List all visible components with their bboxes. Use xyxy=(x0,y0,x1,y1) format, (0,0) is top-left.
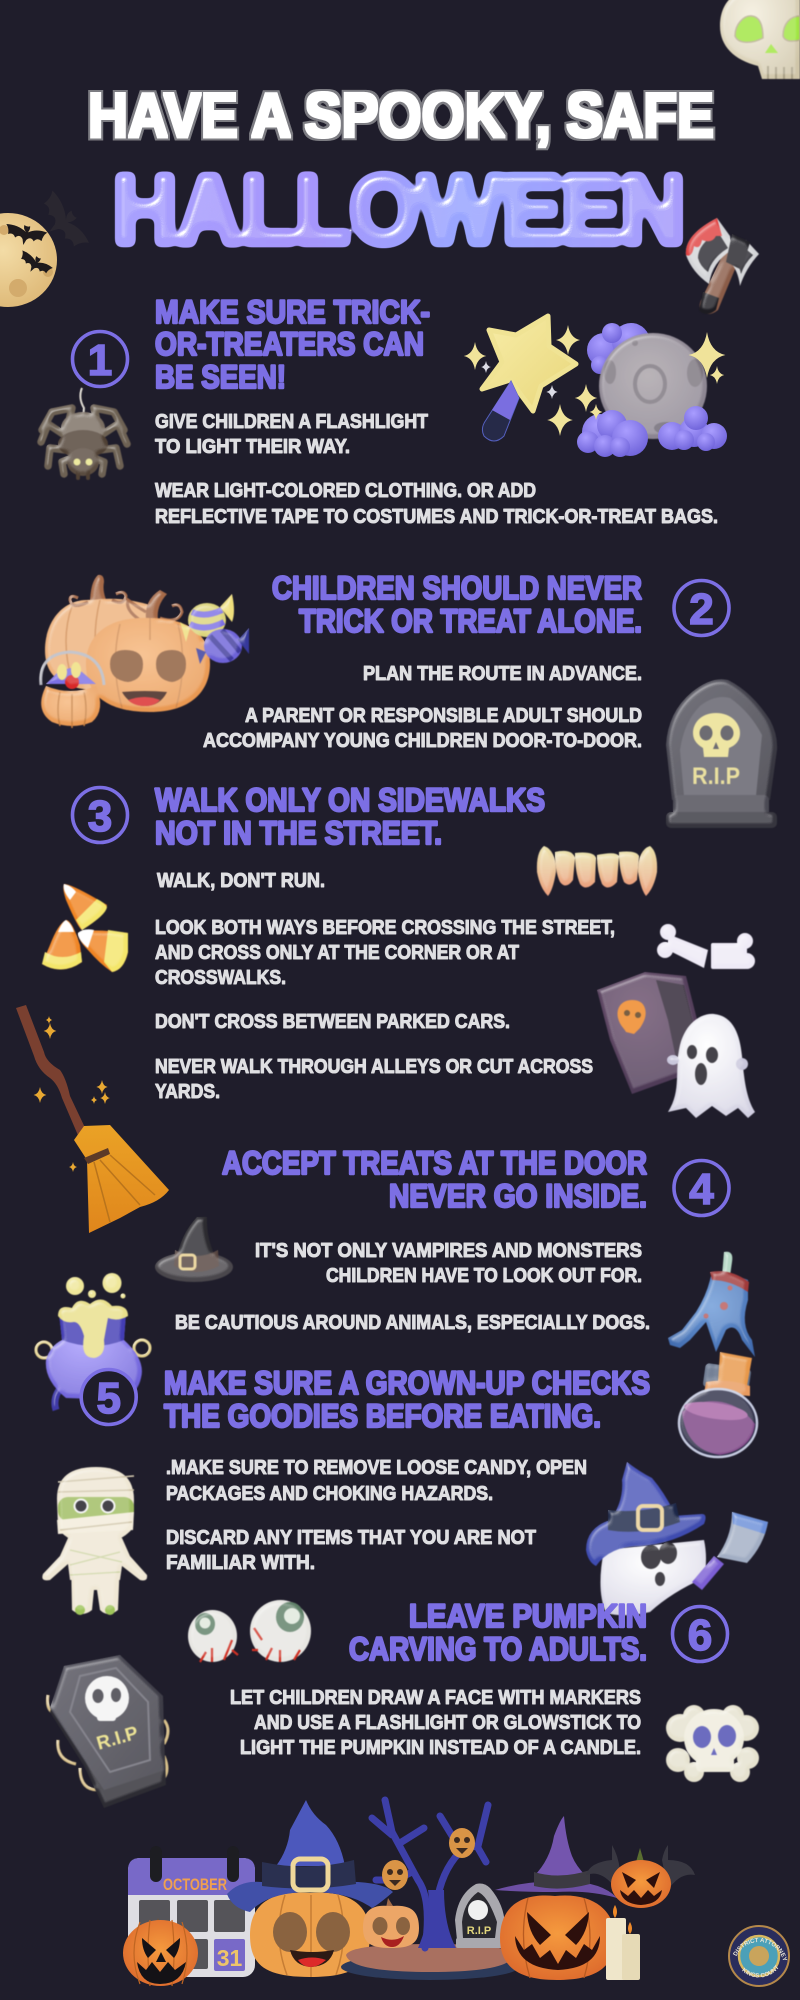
body 3: NEVER WALK THROUGH ALLEYS OR CUT ACROSS xyxy=(155,1056,593,1078)
body 6: LIGHT THE PUMPKIN INSTEAD OF A CANDLE. xyxy=(240,1737,641,1759)
icon: eyeballs xyxy=(188,1600,311,1662)
body 1: WEAR LIGHT-COLORED CLOTHING. OR ADD xyxy=(155,480,536,502)
body 2: ACCOMPANY YOUNG CHILDREN DOOR-TO-DOOR. xyxy=(203,730,642,752)
number badge 5: 5 xyxy=(96,1374,121,1423)
icon: broom xyxy=(16,1005,169,1233)
heading 6 xyxy=(349,1598,647,1667)
number badge 3: 3 xyxy=(88,792,112,841)
small pumpkin xyxy=(363,1898,419,1948)
icon: gravestone with skull xyxy=(666,679,777,828)
icon: zombie hand xyxy=(668,1252,755,1357)
small R.I.P gravestone: R.I.P xyxy=(467,1925,491,1937)
number badge 6: 6 xyxy=(688,1611,712,1660)
heading 3: WALK ONLY ON SIDEWALKS xyxy=(155,782,545,818)
body 1 xyxy=(155,411,718,528)
number badge 3 xyxy=(72,788,128,842)
body 1: TO LIGHT THEIR WAY. xyxy=(155,436,350,458)
icon: vampire fangs xyxy=(537,846,657,896)
calendar: OCTOBER xyxy=(163,1875,227,1894)
icon: gray coffin R.I.P: R.I.P xyxy=(94,1723,141,1755)
bat-winged pumpkin xyxy=(586,1845,695,1908)
icon: broken bone xyxy=(657,924,755,969)
platform xyxy=(341,1944,519,1980)
icon: cauldron xyxy=(36,1273,150,1410)
clouds behind moon xyxy=(587,323,664,374)
section 3 xyxy=(72,782,615,1103)
heading 5: THE GOODIES BEFORE EATING. xyxy=(164,1398,601,1434)
icon: skull and crossbones xyxy=(666,1705,759,1782)
body 4: IT'S NOT ONLY VAMPIRES AND MONSTERS xyxy=(255,1240,642,1262)
body 6 xyxy=(230,1687,641,1759)
body 2: A PARENT OR RESPONSIBLE ADULT SHOULD xyxy=(245,705,642,727)
wand xyxy=(482,381,519,441)
section 1 xyxy=(72,294,718,528)
candles xyxy=(606,1905,640,1980)
heading 1: BE SEEN! xyxy=(155,359,286,395)
body 4: BE CAUTIOUS AROUND ANIMALS, ESPECIALLY DOGS. xyxy=(175,1312,650,1334)
number badge 2: 2 xyxy=(689,585,714,634)
body 6: AND USE A FLASHLIGHT OR GLOWSTICK TO xyxy=(254,1712,641,1734)
heading 2 xyxy=(272,570,642,639)
section 5 xyxy=(81,1365,650,1574)
body 3 xyxy=(155,870,615,1103)
body 3: CROSSWALKS. xyxy=(155,967,286,989)
body 5: .MAKE SURE TO REMOVE LOOSE CANDY, OPEN xyxy=(166,1457,587,1479)
body 5: FAMILIAR WITH. xyxy=(166,1552,315,1574)
heading 3: NOT IN THE STREET. xyxy=(155,815,442,851)
blue tree with pumpkins xyxy=(372,1800,488,1948)
seal: District Attorney Kings County: DISTRICT ATTORNEY xyxy=(732,1938,788,1960)
heading 2: CHILDREN SHOULD NEVER xyxy=(272,570,642,606)
title: Halloween bubble word: HALLOWEEN xyxy=(113,155,685,264)
icon: white ghost xyxy=(667,1014,755,1118)
icon: moon with bats xyxy=(0,188,93,307)
heading 1 xyxy=(155,294,430,395)
icon: wizard ghost with cleaver xyxy=(586,1462,768,1615)
calendar xyxy=(128,1846,255,1977)
body 5: PACKAGES AND CHOKING HAZARDS. xyxy=(166,1483,493,1505)
number badge 1: 1 xyxy=(88,336,112,385)
body 2: PLAN THE ROUTE IN ADVANCE. xyxy=(363,663,642,685)
body 5: DISCARD ANY ITEMS THAT YOU ARE NOT xyxy=(166,1527,536,1549)
sparkles xyxy=(464,325,725,436)
body 3: YARDS. xyxy=(155,1081,220,1103)
heading 4 xyxy=(222,1145,647,1214)
body 3: LOOK BOTH WAYS BEFORE CROSSING THE STREET, xyxy=(155,917,615,939)
candy xyxy=(180,594,249,664)
icon: purple coffin xyxy=(597,972,701,1094)
body 5 xyxy=(166,1457,587,1574)
number badge 4: 4 xyxy=(689,1165,714,1214)
back pumpkin xyxy=(45,575,150,690)
number badge 6 xyxy=(672,1606,728,1662)
body 2 xyxy=(203,663,642,752)
heading 1: MAKE SURE TRICK- xyxy=(155,294,430,330)
large pumpkin with blue witch hat xyxy=(227,1800,393,1977)
section 6 xyxy=(230,1598,728,1759)
icon: star wand, sparkles and moon with clouds xyxy=(464,316,727,457)
title line: HAVE A SPOOKY, SAFE xyxy=(88,81,714,151)
icon: gray coffin R.I.P xyxy=(48,1655,168,1808)
body 3: AND CROSS ONLY AT THE CORNER OR AT xyxy=(155,942,519,964)
number badge 1 xyxy=(72,332,128,386)
icon: skull top right xyxy=(720,0,800,79)
icon: bloody axe xyxy=(686,218,759,314)
body 3: DON'T CROSS BETWEEN PARKED CARS. xyxy=(155,1011,510,1033)
icon: witch hat xyxy=(155,1217,233,1282)
icon: spider xyxy=(41,388,127,478)
heading 1: OR-TREATERS CAN xyxy=(155,326,424,362)
gray moon xyxy=(599,333,707,439)
icon: potion bottle xyxy=(679,1352,757,1457)
body 1: REFLECTIVE TAPE TO COSTUMES AND TRICK-OR-TREAT BAGS. xyxy=(155,506,718,528)
body 3: WALK, DON'T RUN. xyxy=(157,870,325,892)
number badge 4 xyxy=(674,1160,729,1216)
icon: candy corn xyxy=(42,884,128,972)
icon: pumpkins with candy basket xyxy=(41,575,249,728)
heading 3 xyxy=(155,782,545,851)
candy basket xyxy=(41,652,104,728)
seal: District Attorney Kings County: KINGS COUNTY xyxy=(742,1964,778,1978)
heading 4: ACCEPT TREATS AT THE DOOR xyxy=(222,1145,647,1181)
small R.I.P gravestone xyxy=(455,1884,505,1948)
left jack-o-lantern xyxy=(123,1918,198,1986)
clouds front xyxy=(577,406,727,457)
heading 2: TRICK OR TREAT ALONE. xyxy=(299,603,642,639)
orange jack-o-lantern with purple hat xyxy=(495,1816,617,1980)
heading 6: LEAVE PUMPKIN xyxy=(409,1598,647,1634)
star xyxy=(482,316,576,411)
heading 4: NEVER GO INSIDE. xyxy=(389,1178,647,1214)
heading 5 xyxy=(164,1365,650,1434)
calendar: 31 xyxy=(217,1945,242,1971)
heading 5: MAKE SURE A GROWN-UP CHECKS xyxy=(164,1365,650,1401)
body 6: LET CHILDREN DRAW A FACE WITH MARKERS xyxy=(230,1687,641,1709)
icon: mummy xyxy=(42,1467,147,1615)
section 4 xyxy=(175,1145,729,1334)
number badge 2 xyxy=(674,580,729,636)
body 4 xyxy=(175,1240,650,1334)
heading 6: CARVING TO ADULTS. xyxy=(349,1631,647,1667)
section 2 xyxy=(203,570,729,752)
icon: gravestone with skull: R.I.P xyxy=(692,763,740,790)
number badge 5 xyxy=(81,1370,136,1424)
body 4: CHILDREN HAVE TO LOOK OUT FOR. xyxy=(326,1265,642,1287)
front pumpkin xyxy=(86,590,210,712)
body 1: GIVE CHILDREN A FLASHLIGHT xyxy=(155,411,428,433)
